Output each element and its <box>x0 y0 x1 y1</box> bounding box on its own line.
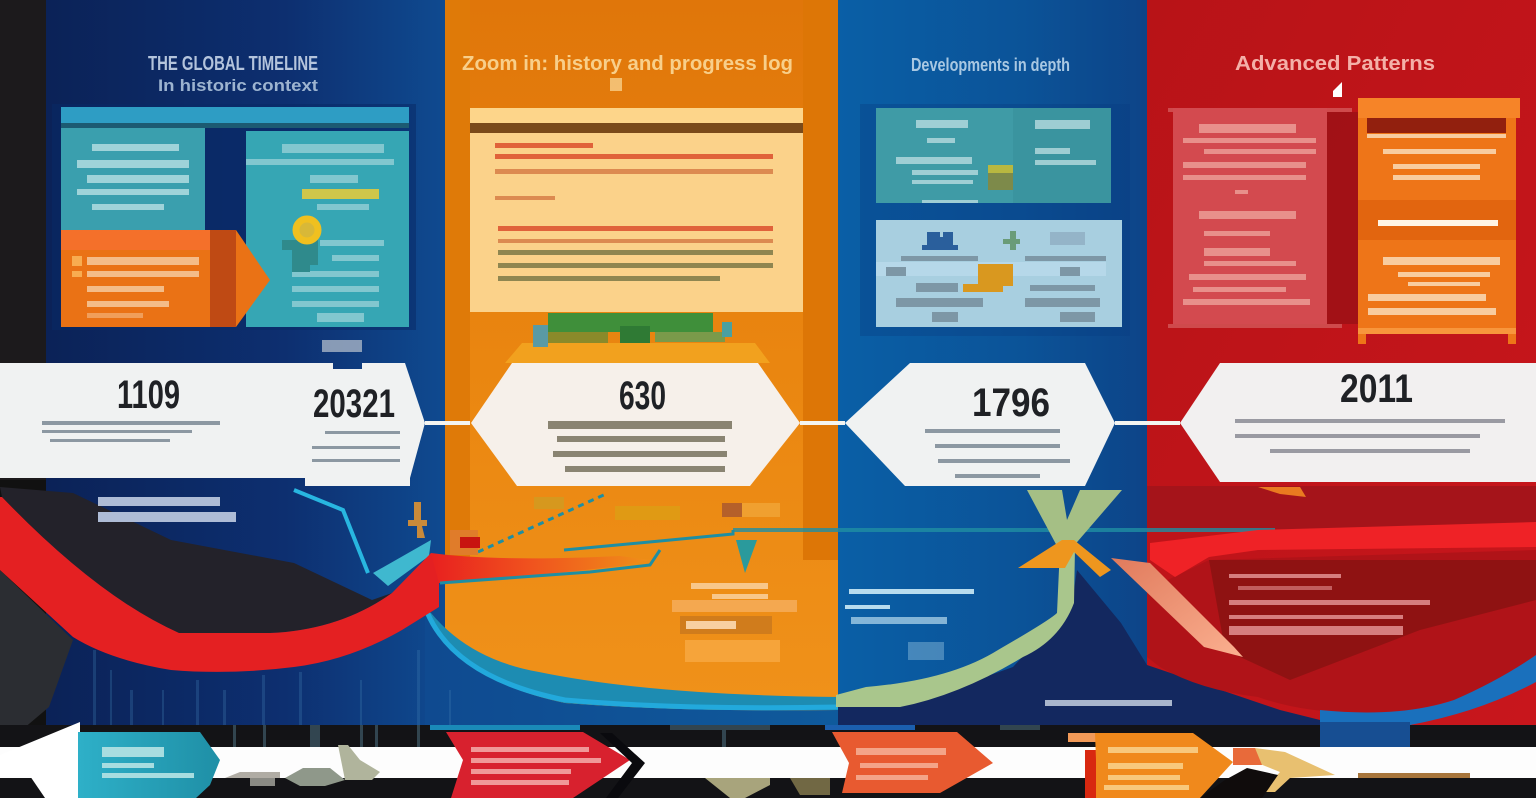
panel: lower orange glow <box>505 343 770 363</box>
heading: second column: Zoom in: history and progress log <box>462 53 793 75</box>
panel: orange column left strip <box>445 0 470 560</box>
banner: first with years: 1109 <box>117 373 180 417</box>
card: teal left <box>61 128 205 230</box>
banner: second hexagon: 630 <box>619 374 666 418</box>
bottom strip <box>0 722 1536 798</box>
icon: orange blob <box>963 264 1013 292</box>
panel: red column <box>1147 0 1536 725</box>
swoosh: teal timeline lines <box>440 493 1275 583</box>
scenery: stub <box>790 778 830 795</box>
grey scenery <box>225 745 380 786</box>
swoosh: teal arc under orange <box>425 610 838 710</box>
icon: orange leaves <box>1018 540 1111 577</box>
card: teal overview <box>876 108 1111 203</box>
swoosh: lower-left dark <box>0 570 73 740</box>
icon: red marker <box>450 530 480 555</box>
panel: cream text card <box>470 108 803 312</box>
tag: red <box>446 732 645 798</box>
banner: first with years <box>0 363 425 486</box>
panel: orange column <box>445 0 838 725</box>
swoosh: cyan line <box>294 490 368 573</box>
tick: orange <box>1258 487 1306 497</box>
tag: orange <box>1068 733 1233 798</box>
banner: third hexagon: 1796 <box>972 381 1050 425</box>
arrow: beige tail <box>1250 748 1335 792</box>
panel: navy column <box>46 0 445 725</box>
icon: swatch <box>988 165 1013 190</box>
tag: teal <box>78 732 220 798</box>
text block: bowl lines <box>1229 574 1430 635</box>
icon: location pin <box>282 219 318 272</box>
panel group: third column cards <box>860 104 1130 336</box>
panel: orange column right strip <box>803 0 838 560</box>
swoosh: cyan wedge <box>373 540 431 586</box>
small orange marks <box>534 497 780 520</box>
heading: first column: In historic context <box>158 76 318 95</box>
bowl: inner dark <box>1209 560 1536 680</box>
connector <box>800 421 845 425</box>
ribbon: red top <box>1150 522 1536 577</box>
scenery: right group <box>705 778 770 798</box>
area: blue below orange curve <box>425 610 838 725</box>
swoosh: red ribbon <box>0 497 439 672</box>
swoosh: salmon streak <box>1111 558 1243 657</box>
panel: left dark edge <box>0 0 46 480</box>
text block: orange lower labels <box>672 583 797 662</box>
text block: blue column labels <box>845 589 974 660</box>
banner: second hexagon <box>471 363 800 486</box>
swoosh: dark shape <box>0 487 392 633</box>
bowl: dark red <box>1147 550 1536 713</box>
icon: small orange cross <box>408 502 427 538</box>
white band <box>0 747 1536 778</box>
chevron: dark <box>1200 768 1278 798</box>
swoosh: navy triangle <box>838 570 1340 725</box>
swoosh: cyan rim <box>427 612 838 708</box>
banner: third hexagon <box>845 363 1115 486</box>
arc: blue under bowl <box>1320 655 1536 725</box>
icon: green leaves <box>1027 490 1122 548</box>
text block: left caption <box>98 497 236 522</box>
card top bar <box>61 107 409 123</box>
card: pale detail <box>876 220 1122 327</box>
heading: first column <box>148 53 318 95</box>
banner: fourth: 2011 <box>1340 367 1413 411</box>
banner: fourth <box>1180 363 1536 482</box>
swoosh: green arc <box>836 547 1075 707</box>
arrow: white left <box>0 722 80 798</box>
label: bottom center <box>1045 700 1172 706</box>
panel: salmon card <box>1168 108 1358 328</box>
swoosh: red to orange streak <box>431 553 650 583</box>
icon: plus <box>1003 231 1020 250</box>
red lower panel shade <box>1147 486 1536 530</box>
arrow tip: orange-red <box>1233 748 1262 765</box>
strip: brown <box>1358 773 1470 778</box>
timeline banners <box>0 363 1536 486</box>
highlight bar <box>302 189 379 199</box>
panel: orange cabinet card <box>1358 98 1520 344</box>
icon: green leaf band <box>533 313 732 347</box>
panel group: first column cards <box>52 104 416 330</box>
connector <box>1115 421 1180 425</box>
heading: first column: THE GLOBAL TIMELINE <box>148 53 318 75</box>
icon: small white marker <box>1333 82 1342 97</box>
panel: blue column <box>838 0 1147 725</box>
card: orange arrow <box>61 230 270 327</box>
icon: small marker <box>610 78 622 91</box>
tag: orange-red <box>832 732 993 793</box>
caption above second year <box>322 340 362 352</box>
heading: third column: Developments in depth <box>911 55 1070 75</box>
heading: fourth column: Advanced Patterns <box>1235 53 1435 75</box>
connector <box>425 421 470 425</box>
icon: people <box>922 232 958 250</box>
icon: teal triangle marker <box>736 540 757 573</box>
card: teal right <box>246 131 409 327</box>
banner: first with years: 20321 <box>313 382 395 426</box>
lines: faint verticals in navy <box>93 650 451 725</box>
